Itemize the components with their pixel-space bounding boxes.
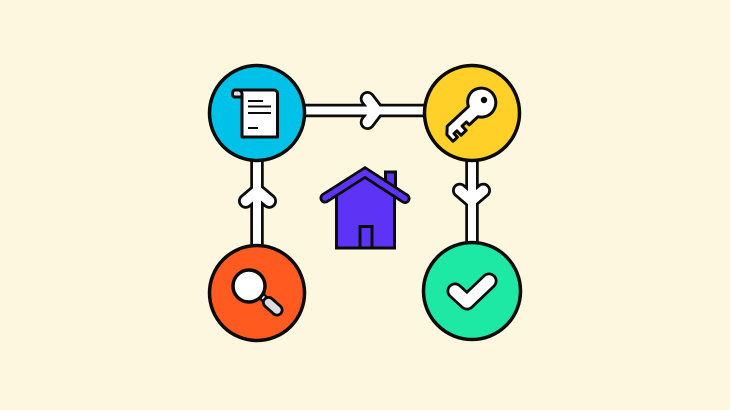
house body [336, 172, 394, 248]
icon: magnifying glass [233, 270, 277, 310]
step circle: search [210, 246, 304, 340]
arrow: key to check [460, 155, 483, 246]
step circle: key [424, 66, 520, 160]
arrow: search to document [246, 160, 269, 250]
step circle: check [424, 242, 520, 340]
icon: house [325, 172, 405, 248]
house chimney [386, 172, 396, 196]
icon: check mark [455, 281, 489, 302]
house roof [325, 172, 405, 198]
icon: document [232, 90, 278, 137]
arrow: document to key [300, 99, 428, 122]
icon: key [437, 82, 502, 145]
step circle: document [210, 66, 304, 160]
house door [360, 226, 372, 248]
